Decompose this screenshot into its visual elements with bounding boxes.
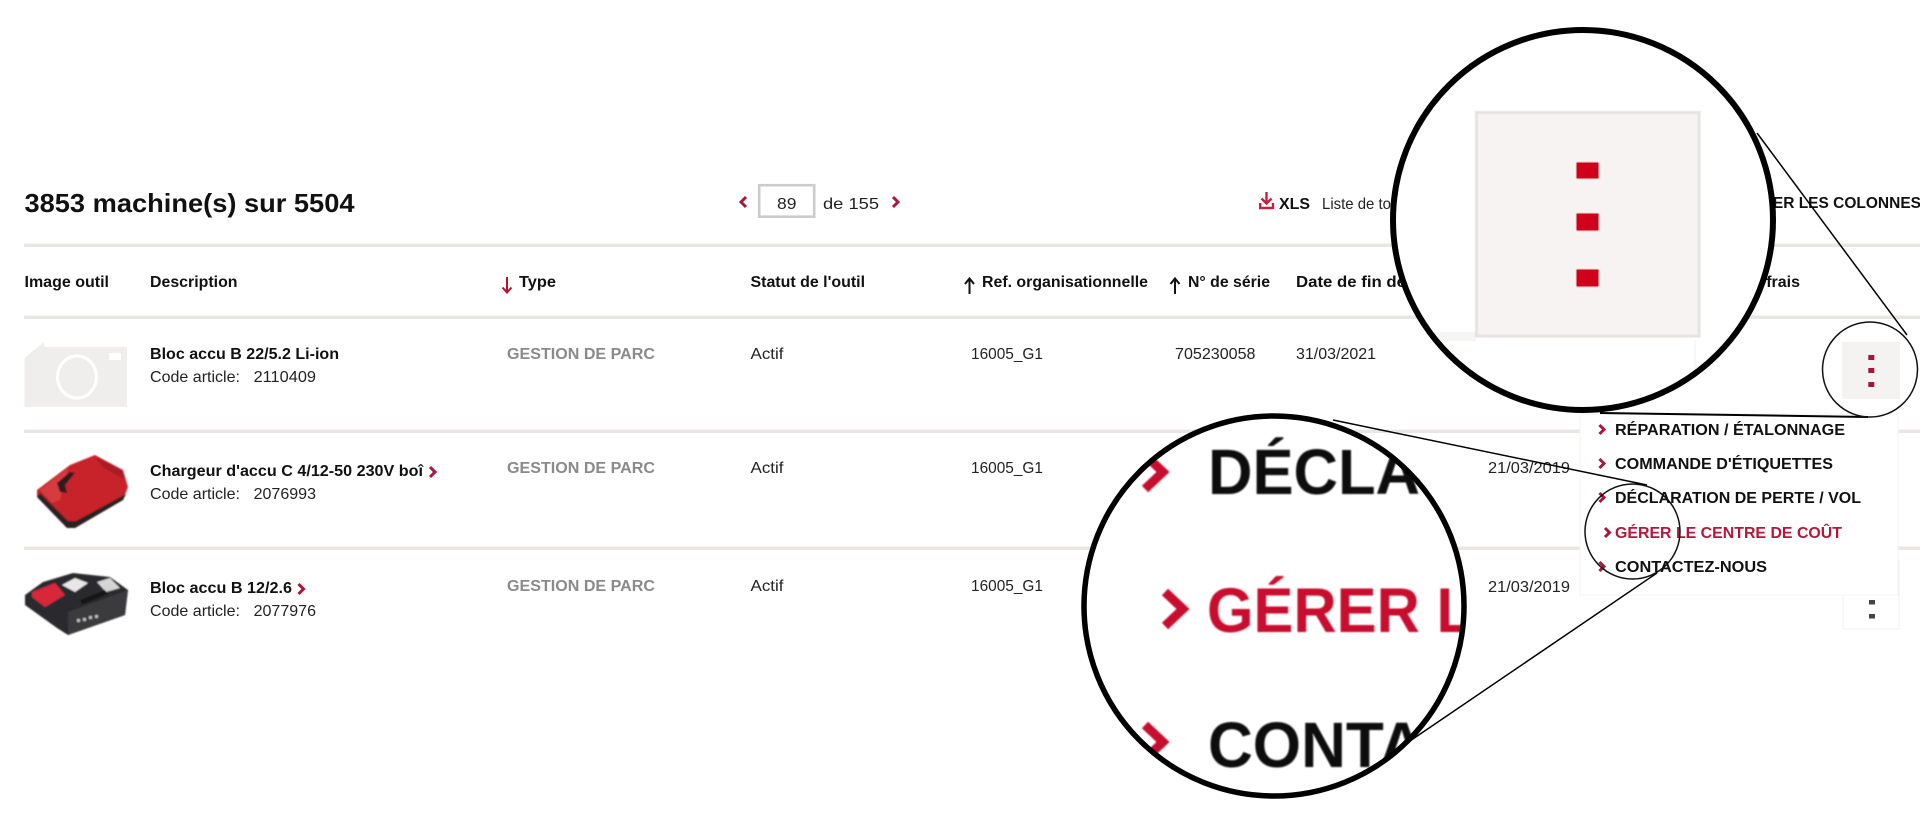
magnified text: declaration: DÉCLA bbox=[1208, 436, 1420, 508]
column toggle button: AFFICHER LES COLONNES bbox=[1716, 195, 1920, 212]
magnified view bbox=[1084, 416, 1473, 796]
magnified text: contact: CONTA bbox=[1208, 709, 1424, 781]
header: image: Image outil bbox=[24, 274, 109, 291]
date: 31/03/2021 bbox=[1296, 346, 1376, 363]
more chevron bbox=[298, 584, 304, 594]
export caption: Liste de to bbox=[1322, 196, 1391, 213]
callout: cost centre magnifier bbox=[1084, 416, 1680, 796]
small source circle bbox=[1822, 322, 1918, 417]
product image: charger bbox=[37, 455, 128, 528]
menu item: loss: DÉCLARATION DE PERTE / VOL bbox=[1615, 490, 1861, 507]
magnified text: declaration bbox=[1141, 436, 1420, 496]
type: GESTION DE PARC bbox=[507, 460, 655, 477]
row 1 bbox=[24, 342, 1900, 407]
article code: 2076993 bbox=[254, 486, 316, 503]
product name: Bloc accu B 22/5.2 Li-ion bbox=[150, 346, 339, 363]
row 3 bbox=[25, 560, 1899, 635]
previous page chevron bbox=[741, 197, 746, 207]
reference: 16005_G1 bbox=[971, 578, 1043, 595]
page total: de 155 bbox=[823, 196, 879, 213]
kebab button bbox=[1842, 342, 1900, 399]
header: status: Statut de l'outil bbox=[750, 274, 865, 291]
date: 21/03/2019 bbox=[1488, 460, 1570, 477]
XLS label: XLS bbox=[1279, 196, 1310, 213]
magnified view bbox=[1393, 30, 1773, 410]
reference: 16005_G1 bbox=[971, 346, 1043, 363]
article code: Code article: bbox=[150, 603, 240, 620]
menu item: contact: CONTACTEZ-NOUS bbox=[1615, 559, 1767, 576]
header: end date: Date de fin de bbox=[1296, 274, 1406, 291]
menu item: cost centre: GÉRER LE CENTRE DE COÛT bbox=[1615, 524, 1843, 542]
sort arrow: reference bbox=[965, 278, 974, 294]
next page chevron bbox=[893, 197, 898, 207]
header: serial: N° de série bbox=[1188, 274, 1270, 291]
product image: battery bbox=[25, 573, 128, 635]
icon: download bbox=[1260, 192, 1273, 208]
menu item: repair: RÉPARATION / ÉTALONNAGE bbox=[1615, 422, 1845, 439]
dropdown menu bbox=[1580, 414, 1898, 595]
kebab button bbox=[1843, 560, 1899, 629]
menu panel bbox=[1580, 414, 1898, 595]
product name: Bloc accu B 12/2.6 bbox=[150, 580, 292, 597]
header: reference: Ref. organisationnelle bbox=[982, 274, 1148, 291]
serial: 705230058 bbox=[1175, 346, 1256, 363]
row 2 bbox=[37, 455, 1570, 528]
product name: Chargeur d'accu C 4/12-50 230V boî bbox=[150, 463, 425, 480]
placeholder image bbox=[24, 342, 127, 407]
sort arrow: serial bbox=[1170, 278, 1180, 294]
magnified text: manage cost centre bbox=[1161, 574, 1460, 634]
pagination bbox=[741, 185, 898, 217]
date: 21/03/2019 bbox=[1488, 579, 1570, 596]
status: Actif bbox=[750, 346, 784, 363]
header: fees: frais bbox=[1766, 274, 1800, 291]
article code: Code article: bbox=[150, 486, 240, 503]
more chevron bbox=[430, 467, 435, 477]
status: Actif bbox=[750, 460, 784, 477]
small source circle bbox=[1585, 484, 1680, 579]
reference: 16005_G1 bbox=[971, 460, 1043, 477]
connector lines bbox=[1333, 420, 1657, 743]
menu item: labels: COMMANDE D'ÉTIQUETTES bbox=[1615, 456, 1833, 473]
magnified text: manage cost centre: GÉRER L bbox=[1207, 576, 1473, 646]
XLS export bbox=[1260, 192, 1391, 213]
callout: kebab button magnifier bbox=[1393, 30, 1918, 417]
magnified button bbox=[1476, 112, 1699, 336]
article code: 2110409 bbox=[254, 369, 316, 386]
type: GESTION DE PARC bbox=[507, 346, 655, 363]
status: Actif bbox=[750, 578, 784, 595]
page number box bbox=[759, 185, 814, 217]
header: description: Description bbox=[150, 274, 238, 291]
table header bbox=[24, 274, 1800, 294]
magnified text: contact bbox=[1141, 720, 1412, 769]
magnified dots bbox=[1576, 162, 1599, 287]
header: type: Type bbox=[519, 274, 556, 291]
sort arrow: type bbox=[502, 277, 512, 292]
title: 3853 machine(s) sur 5504 bbox=[24, 188, 355, 218]
article code: 2077976 bbox=[254, 603, 316, 620]
page number: 89 bbox=[777, 196, 797, 213]
type: GESTION DE PARC bbox=[507, 578, 655, 595]
connector lines bbox=[1600, 133, 1907, 417]
article code: Code article: bbox=[150, 369, 240, 386]
